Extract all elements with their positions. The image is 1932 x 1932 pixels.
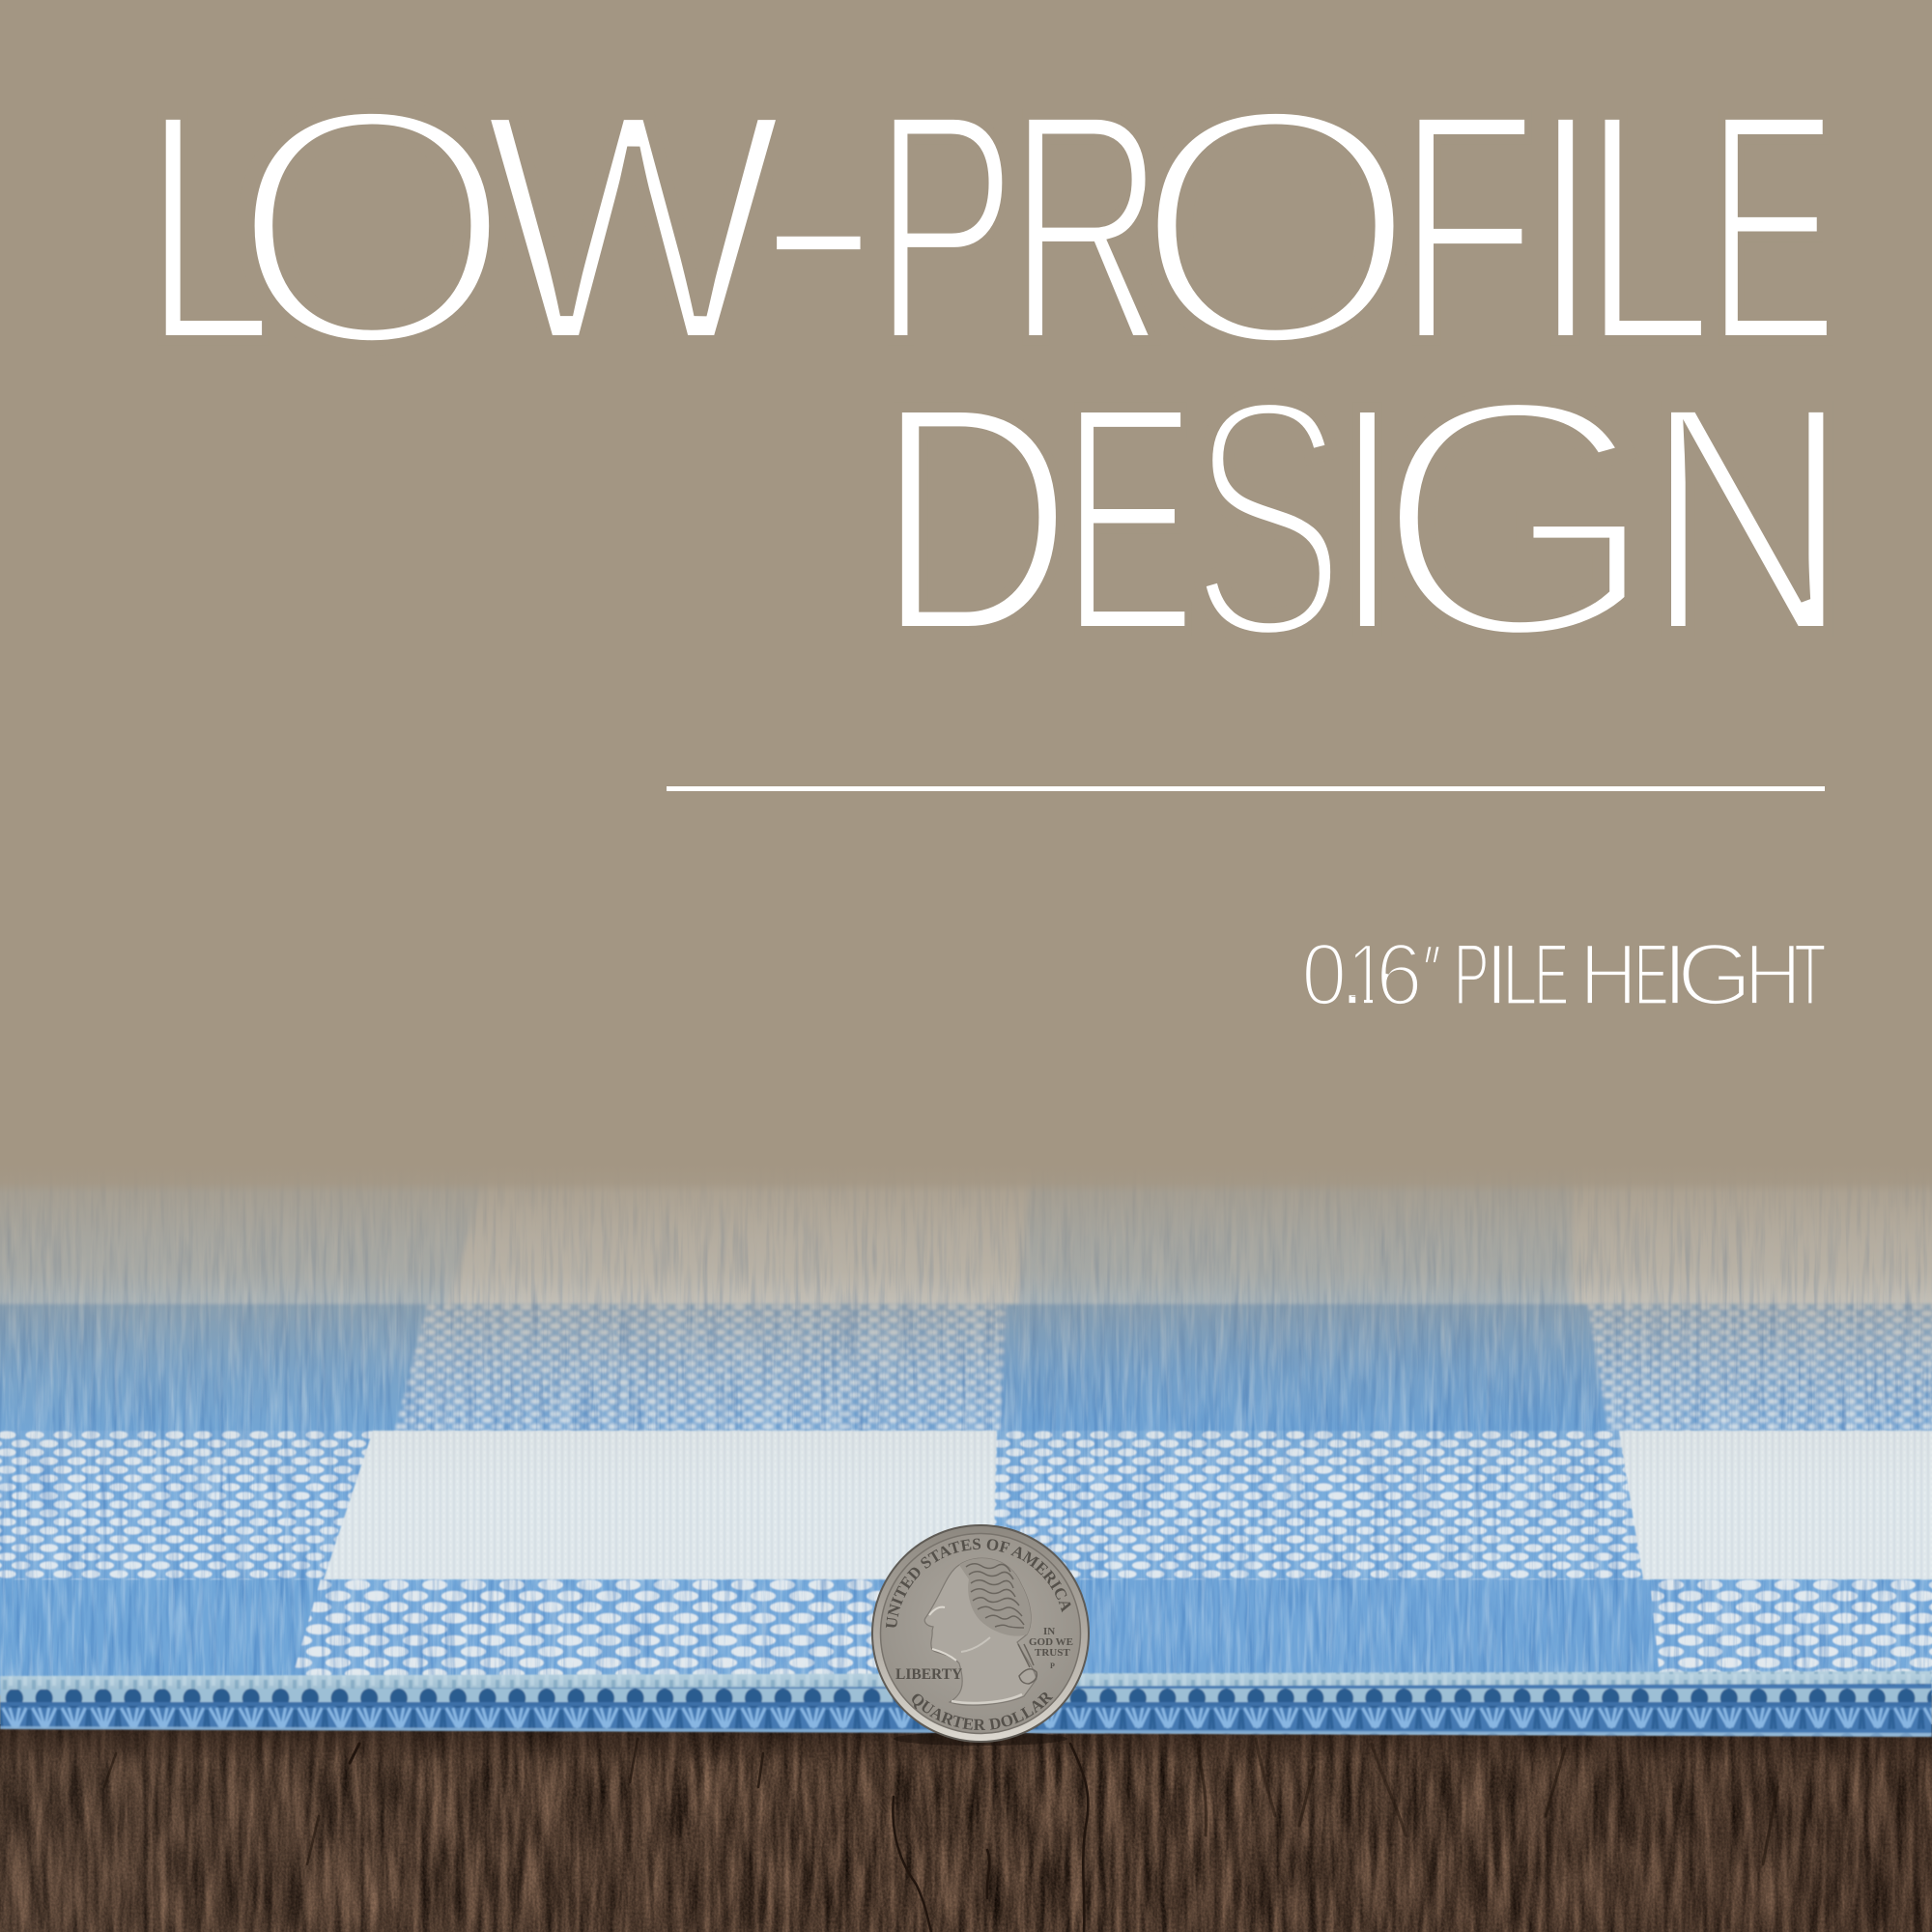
subtitle: pile height: 1 bbox=[1348, 925, 1386, 1024]
title line 2 bbox=[875, 327, 1852, 713]
subtitle: pile height: " bbox=[1410, 928, 1445, 1020]
title line 1 bbox=[143, 37, 1838, 420]
subtitle: pile height: 0 bbox=[1301, 925, 1347, 1024]
subtitle: pile height: H bbox=[1745, 925, 1802, 1024]
rug third row bbox=[0, 1431, 1932, 1583]
title line 1: P bbox=[873, 44, 1017, 412]
title line 1: I bbox=[1533, 44, 1599, 412]
subtitle: pile height: I bbox=[1662, 925, 1689, 1024]
subtitle: pile height: T bbox=[1794, 925, 1826, 1024]
coin legends: QUARTER DOLLAR bbox=[912, 1692, 1053, 1730]
title line 1: O bbox=[229, 37, 515, 420]
rug seam bbox=[0, 1671, 1932, 1696]
subtitle: pile height: . bbox=[1341, 925, 1364, 1023]
title line 2: S bbox=[1189, 327, 1347, 713]
wood floor bbox=[0, 1724, 1932, 1932]
subtitle: pile height bbox=[1306, 945, 1824, 1005]
title line 1: O bbox=[1132, 37, 1420, 420]
rug far row, out of focus bbox=[0, 1154, 1932, 1319]
title line 1: - bbox=[761, 139, 875, 323]
divider rule bbox=[667, 786, 1825, 791]
rug far row stripes bbox=[0, 1164, 1932, 1304]
coin legends: UNITED STATES OF AMERICA bbox=[885, 1538, 1070, 1628]
subtitle: pile height: P bbox=[1454, 925, 1490, 1024]
icon: quarter coin bbox=[871, 1524, 1090, 1746]
coin legends bbox=[885, 1538, 1073, 1730]
title line 2: G bbox=[1373, 327, 1661, 713]
subtitle: pile height: G bbox=[1677, 925, 1752, 1024]
coin legends: P bbox=[1050, 1662, 1055, 1670]
coin legends: GOD WE bbox=[1029, 1636, 1073, 1648]
subtitle: pile height: E bbox=[1634, 925, 1669, 1024]
title line 2: D bbox=[875, 338, 1073, 703]
subtitle: pile height: E bbox=[1534, 925, 1569, 1024]
rug second row bbox=[0, 1304, 1932, 1435]
subtitle: pile height: I bbox=[1484, 925, 1510, 1024]
title line 2: I bbox=[1335, 338, 1400, 703]
title line 1: L bbox=[1582, 44, 1713, 412]
rug white panels bbox=[324, 1431, 1932, 1579]
subtitle: pile height: H bbox=[1579, 925, 1637, 1024]
rug weave streaks, dark bbox=[0, 1304, 1932, 1681]
rug fourth row bbox=[0, 1579, 1932, 1695]
title line 2: E bbox=[1062, 338, 1197, 703]
title bbox=[143, 37, 1852, 713]
coin legends: TRUST bbox=[1035, 1647, 1070, 1659]
subtitle: pile height: 6 bbox=[1376, 925, 1423, 1024]
coin legends: IN bbox=[1043, 1626, 1055, 1637]
coin bust bbox=[924, 1558, 1037, 1705]
rug edge binding bbox=[0, 1671, 1932, 1737]
coin legends: LIBERTY bbox=[895, 1666, 962, 1683]
title line 1: R bbox=[1008, 44, 1165, 412]
title line 1: F bbox=[1397, 44, 1538, 412]
title line 1: E bbox=[1706, 44, 1838, 412]
title line 1: L bbox=[143, 44, 273, 412]
gingham rug bbox=[0, 1187, 1932, 1738]
rug top fade into background bbox=[0, 1111, 1932, 1488]
title line 2: N bbox=[1642, 338, 1852, 703]
rug weave streaks, light bbox=[0, 1304, 1932, 1681]
rug knit edge bbox=[0, 1684, 1932, 1737]
title line 1: W bbox=[481, 43, 787, 415]
subtitle: pile height: L bbox=[1502, 925, 1538, 1024]
